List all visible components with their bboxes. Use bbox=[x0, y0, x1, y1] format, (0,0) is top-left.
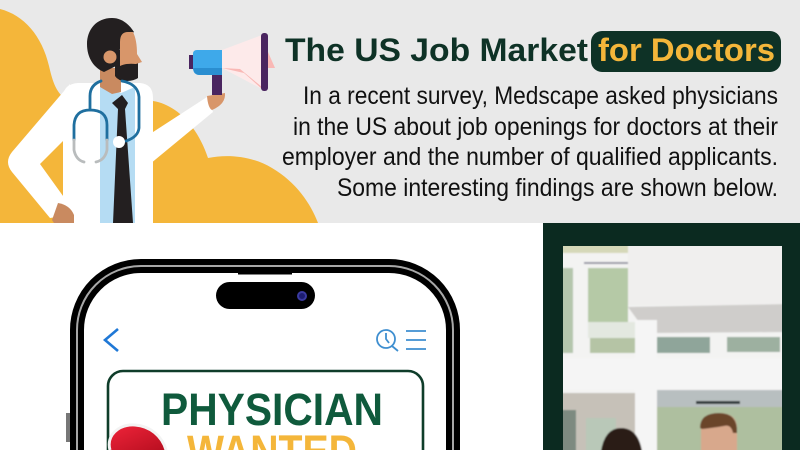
intro text bbox=[282, 82, 778, 202]
job card bbox=[108, 371, 423, 450]
beard bbox=[115, 50, 138, 81]
icon: doctor with megaphone bbox=[8, 18, 275, 223]
man bbox=[701, 413, 737, 450]
speaker tab bbox=[238, 273, 292, 274]
yellow blob background bbox=[0, 9, 318, 223]
megaphone bbox=[189, 33, 275, 95]
title: The US Job Market bbox=[285, 32, 588, 68]
icon: red megaphone bbox=[109, 425, 166, 450]
neck bbox=[100, 68, 121, 94]
phone edge highlight bbox=[77, 266, 453, 450]
camera bbox=[298, 292, 306, 300]
ear bbox=[104, 50, 116, 64]
panel: phone bbox=[66, 266, 453, 450]
coat left arm bbox=[8, 84, 76, 218]
shirt bbox=[100, 87, 135, 223]
phone body bbox=[77, 266, 453, 450]
coat right arm bbox=[150, 97, 213, 164]
stethoscope bbox=[74, 81, 139, 162]
hip hand bbox=[52, 203, 74, 223]
dynamic island bbox=[216, 282, 315, 309]
tie bbox=[112, 95, 133, 223]
title highlight pill: for Doctors bbox=[598, 32, 775, 68]
icon: history search bbox=[377, 330, 398, 351]
phone side buttons bbox=[66, 413, 70, 442]
raised hand bbox=[207, 93, 225, 110]
coat body bbox=[63, 83, 153, 223]
stethoscope chest piece bbox=[113, 136, 125, 148]
icon: menu bbox=[406, 331, 426, 349]
woman bbox=[600, 428, 643, 450]
panel: header bbox=[0, 0, 800, 223]
panel: photo frame bbox=[543, 223, 800, 450]
hair bbox=[87, 18, 134, 72]
face bbox=[120, 32, 142, 66]
card heading: physician: PHYSICIAN bbox=[161, 384, 383, 435]
icon: back chevron bbox=[105, 329, 118, 351]
photo of doctors in lobby bbox=[563, 246, 782, 450]
